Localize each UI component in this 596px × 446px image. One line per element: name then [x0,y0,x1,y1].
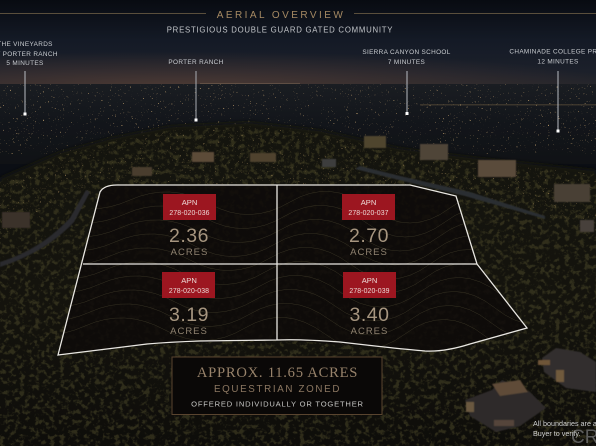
disclaimer note: Buyer to verify. [533,429,580,438]
lot 036: ACRES [171,247,208,258]
lot 037: ACRES [350,247,388,258]
lot 039: APN [362,276,377,285]
lots dark overlay [58,185,527,355]
lot 037: 278-020-037 [348,210,389,217]
callout: The Vineyards [0,41,58,116]
callout box: total acreage: APPROX. 11.65 ACRES [197,365,358,381]
lot 037: 2.70 [349,225,389,247]
hillside texture [0,120,596,446]
lot 039: 278-020-039 [349,288,390,295]
lot 038: 278-020-038 [169,288,209,295]
subtitle: PRESTIGIOUS DOUBLE GUARD GATED COMMUNITY [167,26,393,34]
lot 038: APN [181,276,197,285]
lot 038: 3.19 [169,304,209,326]
callout: Sierra Canyon School [362,49,451,115]
callout: Porter Ranch: PORTER RANCH [168,59,224,66]
background: city lights valley [0,83,596,154]
callout box: total acreage: EQUESTRIAN ZONED [214,384,341,395]
callout: Porter Ranch [168,59,224,122]
lot 037 [342,194,395,258]
lot 039: ACRES [351,326,388,337]
lot 037: APN [361,198,376,207]
lot 038 [162,272,215,337]
disclaimer note [533,419,596,438]
lot 039 [343,272,396,337]
callout: The Vineyards: 5 MINUTES [6,60,44,67]
lot 039: 3.40 [350,304,389,326]
topographic contour lines [64,191,522,346]
callout: Sierra Canyon School: 7 MINUTES [388,59,425,66]
title: AERIAL OVERVIEW [217,10,345,21]
lot 036: 278-020-036 [169,210,210,217]
lot 036: APN [182,198,197,207]
callout: Sierra Canyon School: SIERRA CANYON SCHOOL [362,49,451,56]
callout: Chaminade College Prep: 12 MINUTES [537,58,579,66]
callout box: total acreage: OFFERED INDIVIDUALLY OR TOGETHER [191,400,364,408]
background: night sky [0,0,596,90]
lot 038: ACRES [170,326,208,337]
houses along the ridge [0,136,594,267]
lot 036 [163,194,216,258]
background: hillside [0,122,596,446]
callout box: total acreage [172,357,382,414]
houses: lower right estates [465,348,596,432]
callout: Chaminade College Prep [509,48,596,132]
parcel boundary map [58,185,527,355]
lot 036: 2.36 [169,225,209,247]
